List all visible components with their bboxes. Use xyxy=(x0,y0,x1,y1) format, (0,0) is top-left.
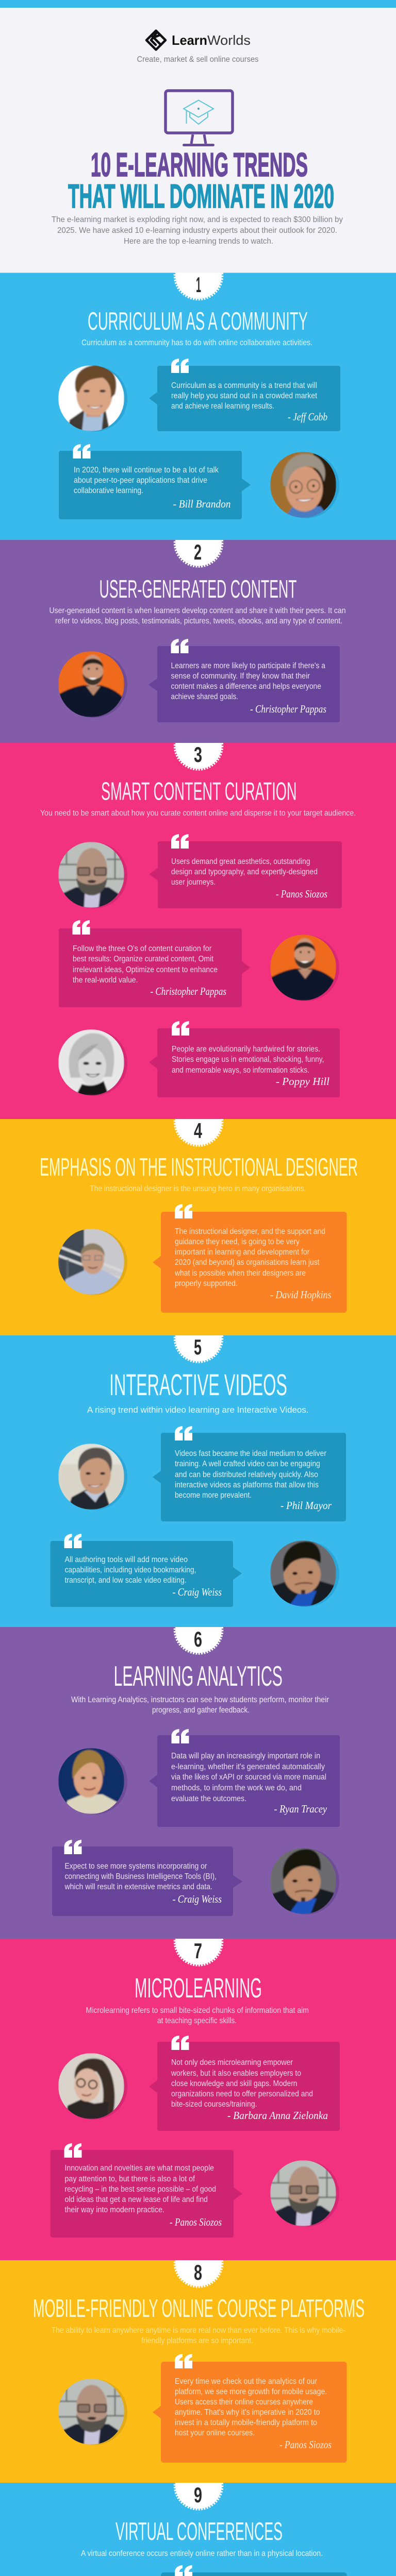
photo: Panos Siozos xyxy=(58,842,127,908)
quote card: Panos Siozos: - Panos Siozos xyxy=(279,2438,332,2451)
header xyxy=(52,31,343,246)
quote card: Jeff Cobb xyxy=(153,2565,346,2576)
quote card: Ryan Tracey: Data will play an increasingly important role in xyxy=(171,1752,320,1760)
description xyxy=(52,2326,345,2345)
description: A rising trend within video learning are Interactive Videos. xyxy=(87,1405,308,1415)
photo: Panos Siozos xyxy=(58,2379,127,2445)
photo: Bill Brandon xyxy=(270,452,339,518)
quote card: Jeff Cobb: really help you stand out in a crowded market xyxy=(171,392,318,400)
heading: MICROLEARNING xyxy=(135,1973,262,2004)
number badge 6 xyxy=(174,1606,223,1654)
quote card: Christopher Pappas: - Christopher Pappas xyxy=(151,985,226,997)
quote card: Poppy Hill xyxy=(149,1021,340,1097)
photo: Barbara Anna Zielonka xyxy=(58,2053,127,2120)
quote card: Panos Siozos xyxy=(153,2354,346,2463)
quote card: Poppy Hill: and memorable ways, so information sticks. xyxy=(172,1066,309,1075)
quote card: Craig Weiss: transcript, and low scale video editing. xyxy=(65,1576,187,1585)
quote card: Panos Siozos: anytime. That's why it's imperative in 2020 to xyxy=(175,2408,320,2417)
description xyxy=(71,1696,329,1715)
quote card: David Hopkins: - David Hopkins xyxy=(270,1289,331,1301)
intro text: Here are the top e-learning trends to watch. xyxy=(124,237,273,246)
quote card: Panos Siozos: host your online courses. xyxy=(175,2429,255,2437)
panel: trend 6 learning analytics xyxy=(0,1606,396,1939)
quote card: Christopher Pappas: irrelevant ideas, Optimize content to enhance xyxy=(73,965,218,974)
quote card: Craig Weiss xyxy=(51,1534,242,1607)
quote card: Christopher Pappas: best results: Organize curated content, Omit xyxy=(73,955,214,963)
quote card: David Hopkins: guidance they need, is going to be very xyxy=(175,1238,300,1246)
number badge 3: 3 xyxy=(194,742,202,767)
quote card: Panos Siozos: recycling – in the best sense possible – of good xyxy=(65,2185,216,2194)
panel: trend 4 emphasis on the instructional designer xyxy=(0,1098,396,1335)
intro text: The e-learning market is exploding right now, and is expected to reach $300 billion by xyxy=(52,215,343,224)
quote card: Ryan Tracey: via the likes of xAPI or sourced via more manual xyxy=(171,1773,326,1782)
tagline: Create, market & sell online courses xyxy=(137,55,259,64)
quote card: Jeff Cobb xyxy=(149,359,340,431)
quote card: Jeff Cobb: Curriculum as a community is a trend that will xyxy=(171,381,317,390)
photo: Phil Mayor xyxy=(58,1444,127,1510)
quote card: Phil Mayor: and can be distributed relatively quickly. Also xyxy=(175,1470,318,1479)
quote card: Christopher Pappas: - Christopher Pappas xyxy=(250,703,326,715)
quote card: Phil Mayor: interactive videos as platforms that allow this xyxy=(175,1481,319,1489)
description xyxy=(50,606,345,625)
top colour band xyxy=(0,0,396,8)
quote card: Christopher Pappas xyxy=(148,639,340,722)
quote card: Phil Mayor xyxy=(153,1426,346,1521)
quote card: Craig Weiss: All authoring tools will add more video xyxy=(65,1555,188,1564)
quote card: Phil Mayor: become more prevalent. xyxy=(175,1491,252,1500)
quote card: Panos Siozos: design and typography, and expertly-designed xyxy=(171,868,318,876)
quote card: Bill Brandon: In 2020, there will continue to be a lot of talk xyxy=(74,466,219,474)
description: User-generated content is when learners develop content and share it with their peers. It can xyxy=(50,606,345,615)
quote card: Panos Siozos: user journeys. xyxy=(171,878,216,887)
quote card: Panos Siozos: pay attention to, but there is also a lot of xyxy=(65,2175,195,2183)
quote card: Craig Weiss: Expect to see more systems incorporating or xyxy=(65,1862,207,1871)
quote card: Panos Siozos: Every time we check out the analytics of our xyxy=(175,2377,317,2386)
description: at teaching specific skills. xyxy=(157,2016,237,2025)
quote card: Christopher Pappas xyxy=(59,920,250,1007)
title xyxy=(68,146,334,215)
number badge 6: 6 xyxy=(194,1627,202,1651)
quote card: David Hopkins: The instructional designer, and the support and xyxy=(175,1227,325,1236)
quote card: David Hopkins: important in learning and development for xyxy=(175,1248,309,1257)
logo: LearnWorlds: Worlds xyxy=(207,32,251,48)
quote card: Craig Weiss: connecting with Business Intelligence Tools (BI), xyxy=(65,1872,217,1881)
quote card: David Hopkins: properly supported. xyxy=(175,1279,238,1288)
quote card: Christopher Pappas: Learners are more likely to participate if there's a xyxy=(171,662,325,670)
panel: trend 1 curriculum as a community xyxy=(0,251,396,540)
quote card: Barbara Anna Zielonka xyxy=(149,2036,340,2131)
number badge 2 xyxy=(174,519,223,567)
quote card: Ryan Tracey: evaluate the outcomes. xyxy=(171,1794,246,1803)
icon: LearnWorlds diamond xyxy=(146,31,166,49)
photo: David Hopkins xyxy=(58,1229,127,1295)
quote card: Phil Mayor: - Phil Mayor xyxy=(280,1499,332,1512)
description: The ability to learn anywhere anytime is more real now than ever before. This is why mobile- xyxy=(52,2326,345,2335)
quote card: Craig Weiss: - Craig Weiss xyxy=(172,1893,222,1905)
panel: trend 5 interactive videos xyxy=(0,1314,396,1627)
quote card: Ryan Tracey: methods, to inform the work we do, and xyxy=(171,1784,302,1792)
quote card: Barbara Anna Zielonka: Not only does microlearning empower xyxy=(171,2058,293,2067)
quote card: Ryan Tracey: - Ryan Tracey xyxy=(274,1803,327,1815)
quote card: Ryan Tracey xyxy=(149,1729,340,1827)
quote card: Bill Brandon: - Bill Brandon xyxy=(173,498,231,510)
number badge 9 xyxy=(174,2462,223,2510)
quote card: David Hopkins: what is possible when their designers are xyxy=(174,1269,306,1278)
quote card: Ryan Tracey: e-learning, whether it's generated automatically xyxy=(171,1762,325,1771)
quote card: Christopher Pappas: sense of community. If they know that their xyxy=(171,672,310,681)
quote card: Christopher Pappas: content makes a difference and helps everyone xyxy=(171,682,321,691)
quote card: Barbara Anna Zielonka: close knowledge and skill gaps. Modern xyxy=(171,2079,297,2088)
quote card: Panos Siozos: Users demand great aesthetics, outstanding xyxy=(171,857,310,866)
quote card: Panos Siozos: platform, we see more growth for mobile usage. xyxy=(175,2387,327,2396)
panel: trend 7 microlearning xyxy=(0,1918,396,2260)
quote card: Panos Siozos: old ideas that get a new lease of life and find xyxy=(65,2195,208,2204)
quote card: Poppy Hill: Stories engage us in emotional, shocking, funny, xyxy=(172,1055,324,1064)
number badge 1: 1 xyxy=(196,273,201,297)
icon: monitor with graduation cap xyxy=(166,91,233,146)
photo: Craig Weiss xyxy=(270,1540,339,1607)
number badge 3 xyxy=(174,722,223,770)
number badge 1 xyxy=(174,251,223,300)
description xyxy=(86,2006,309,2025)
panel: trend 8 mobile-friendly online course platforms xyxy=(0,2239,396,2483)
quote card: Craig Weiss: capabilities, including video bookmarking, xyxy=(65,1566,196,1574)
quote card: Phil Mayor: Videos fast became the ideal medium to deliver xyxy=(175,1449,326,1458)
quote card: Panos Siozos: their way into modern practice. xyxy=(65,2206,164,2214)
description: You need to be smart about how you curate content online and disperse it to your target audience. xyxy=(40,809,356,818)
intro text: 2025. We have asked 10 e-learning industry experts about their outlook for 2020. xyxy=(57,226,337,235)
quote card: Bill Brandon: collaborative learning. xyxy=(74,486,143,495)
quote card: Barbara Anna Zielonka: workers, but it also enables employers to xyxy=(171,2069,301,2078)
panel: trend 9 virtual conferences xyxy=(0,2462,396,2576)
photo: Ryan Tracey xyxy=(58,1748,127,1815)
quote card: Bill Brandon: about peer-to-peer applications that drive xyxy=(74,476,207,485)
description: friendly platforms are so important. xyxy=(141,2336,253,2345)
number badge 5: 5 xyxy=(194,1335,202,1359)
quote card: Panos Siozos xyxy=(51,2143,242,2238)
logo: LearnWorlds xyxy=(146,31,251,49)
number badge 5 xyxy=(174,1314,223,1362)
quote card: Christopher Pappas: Follow the three O's of content curation for xyxy=(73,944,211,953)
photo: Jeff Cobb xyxy=(58,365,127,432)
photo: Craig Weiss xyxy=(270,1848,339,1914)
quote card: Craig Weiss: which will result in extensive metrics and data. xyxy=(64,1883,212,1891)
quote card: Phil Mayor: training. A well crafted video can be engaging xyxy=(175,1460,320,1468)
number badge 4 xyxy=(174,1098,223,1146)
number badge 8: 8 xyxy=(194,2260,202,2284)
description: The instructional designer is the unsung hero in many organisations. xyxy=(90,1184,306,1193)
quote card: Panos Siozos: Users access their online courses anywhere xyxy=(175,2398,313,2406)
quote card: Panos Siozos: invest in a totally mobile-friendly platform to xyxy=(175,2418,317,2427)
quote card: David Hopkins xyxy=(153,1204,346,1313)
quote card: Craig Weiss: - Craig Weiss xyxy=(172,1586,222,1598)
description: Curriculum as a community has to do with online collaborative activities. xyxy=(81,338,312,347)
photo: Christopher Pappas xyxy=(58,651,127,718)
quote card: Panos Siozos: - Panos Siozos xyxy=(276,888,327,900)
quote card: Panos Siozos xyxy=(149,834,342,908)
quote card: Jeff Cobb: and achieve real learning results. xyxy=(171,402,274,411)
photo: Panos Siozos xyxy=(270,2160,339,2227)
number badge 8 xyxy=(174,2239,223,2287)
photo: Christopher Pappas xyxy=(270,935,339,1001)
quote card: Barbara Anna Zielonka: bite-sized courses/training. xyxy=(171,2100,257,2109)
quote card: Barbara Anna Zielonka: - Barbara Anna Zielonka xyxy=(227,2109,328,2122)
number badge 9: 9 xyxy=(194,2483,202,2507)
description: Microlearning refers to small bite-sized chunks of information that aim xyxy=(86,2006,309,2015)
quote card: Poppy Hill: - Poppy Hill xyxy=(276,1075,329,1088)
quote card: Christopher Pappas: the real-world value. xyxy=(73,976,138,985)
description: With Learning Analytics, instructors can see how students perform, monitor their xyxy=(71,1696,329,1704)
photo: Poppy Hill xyxy=(58,1029,127,1096)
number badge 7: 7 xyxy=(194,1939,202,1963)
logo: LearnWorlds: Learn xyxy=(172,32,207,48)
number badge 7 xyxy=(174,1918,223,1965)
panel: trend 3 smart content curation xyxy=(0,722,396,1119)
description: refer to videos, blog posts, testimonials, pictures, tweets, ebooks, and any type of content. xyxy=(55,617,342,625)
panel: trend 2 user-generated content xyxy=(0,519,396,743)
quote card: David Hopkins: 2020 (and beyond) as organisations learn just xyxy=(175,1258,320,1267)
quote card: Jeff Cobb: - Jeff Cobb xyxy=(288,411,327,423)
quote card: Christopher Pappas: achieve shared goals. xyxy=(171,692,238,701)
quote card: Craig Weiss xyxy=(52,1840,242,1916)
number badge 4: 4 xyxy=(194,1118,202,1143)
quote card: Panos Siozos: - Panos Siozos xyxy=(170,2216,222,2228)
quote card: Panos Siozos: Innovation and novelties are what most people xyxy=(65,2164,214,2173)
number badge 2: 2 xyxy=(194,540,202,564)
quote card: Poppy Hill: People are evolutionarily hardwired for stories. xyxy=(172,1045,320,1054)
quote card: Barbara Anna Zielonka: organizations need to offer personalized and xyxy=(171,2090,313,2098)
description: progress, and gather feedback. xyxy=(152,1706,250,1715)
description: A virtual conference occurs entirely online rather than in a physical location. xyxy=(81,2549,323,2558)
quote card: Bill Brandon xyxy=(59,444,251,519)
intro text xyxy=(52,215,343,246)
